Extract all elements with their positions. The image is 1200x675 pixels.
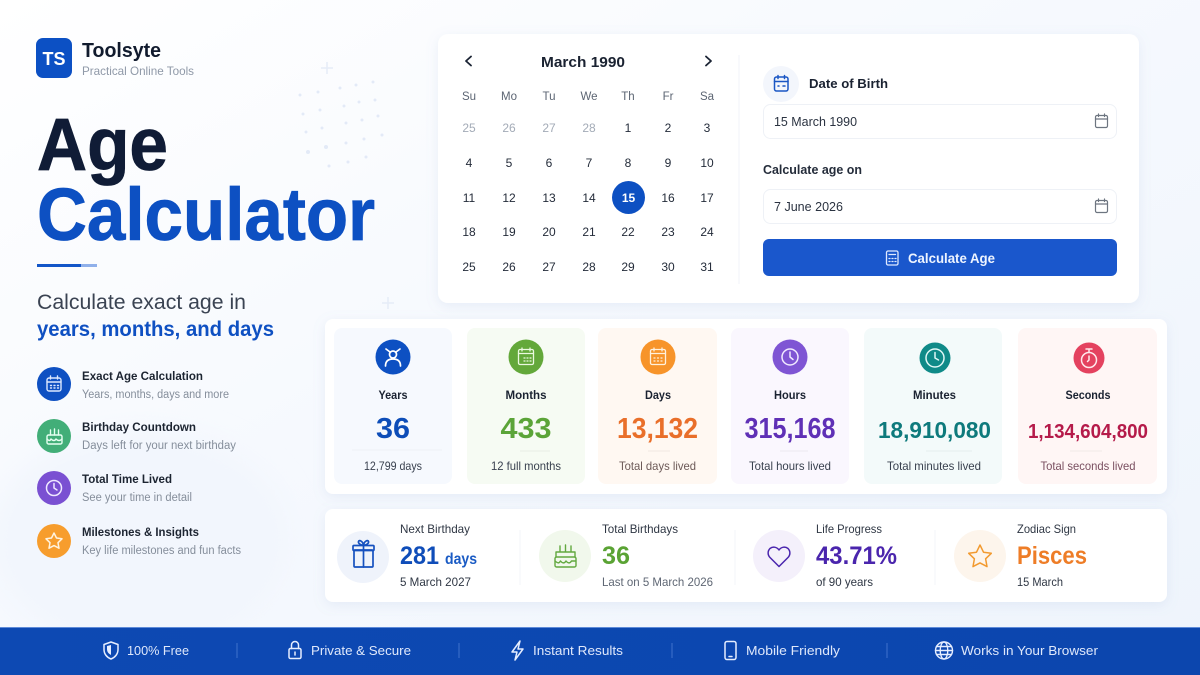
date grid: 25	[462, 121, 476, 135]
feature: milestones: Milestones & Insights	[82, 525, 199, 539]
feature: time lived	[37, 471, 192, 505]
stat: years: 12,799 days	[364, 459, 422, 473]
insight: next birthday: Next Birthday	[400, 522, 470, 536]
date grid: 31	[700, 260, 714, 274]
stat: minutes	[864, 328, 1002, 484]
date grid: 12	[502, 191, 516, 205]
stat: months: 12 full months	[491, 459, 561, 473]
badge: mobile: Mobile Friendly	[746, 643, 841, 658]
input: calculate date: 7 June 2026	[774, 199, 843, 214]
calendar	[462, 54, 715, 274]
date grid: 28	[582, 121, 596, 135]
input: date of birth: 15 March 1990	[774, 114, 857, 129]
feature: milestones: Key life milestones and fun facts	[82, 545, 241, 557]
date grid: 15	[622, 191, 635, 205]
stat: days: Days	[645, 388, 671, 402]
input: calculate date	[764, 190, 1116, 224]
stat: seconds	[1018, 328, 1157, 484]
title: Age	[37, 103, 168, 186]
stat: minutes: Minutes	[913, 388, 956, 402]
date grid: 4	[466, 156, 473, 170]
insight: zodiac sign: Pisces	[1017, 542, 1087, 570]
brand name: Toolsyte	[82, 40, 161, 62]
feature: birthday: Birthday Countdown	[82, 420, 196, 434]
feature: exact age: Exact Age Calculation	[82, 369, 203, 383]
date grid: 8	[625, 156, 632, 170]
panel: calendar and form	[438, 34, 1139, 303]
feature: exact age	[37, 367, 229, 401]
date grid: 20	[542, 225, 556, 239]
insight: zodiac sign: Zodiac Sign	[1017, 522, 1076, 536]
stat: days: Total days lived	[619, 459, 696, 473]
date grid: 19	[502, 225, 516, 239]
calendar header	[466, 54, 711, 71]
insight: life progress	[753, 522, 897, 589]
stat: days	[598, 328, 717, 484]
date grid: 23	[661, 225, 675, 239]
weekday row: Th	[621, 91, 635, 103]
badge: browser: Works in Your Browser	[961, 643, 1099, 658]
badge: free: 100% Free	[127, 643, 189, 658]
date grid: 11	[463, 191, 476, 205]
stat: seconds: 1,134,604,800	[1028, 421, 1148, 443]
insight: next birthday: 5 March 2027	[400, 575, 471, 589]
feature: milestones	[37, 524, 241, 558]
stat: years: 36	[376, 413, 410, 445]
insight: next birthday: 281	[400, 542, 439, 570]
date grid: 24	[700, 225, 714, 239]
feature: birthday	[37, 419, 236, 453]
date grid: 26	[502, 121, 516, 135]
weekday row	[462, 91, 715, 103]
date grid: 27	[542, 121, 556, 135]
date grid: 26	[502, 260, 516, 274]
stat: hours: Total hours lived	[749, 459, 831, 473]
date grid: 22	[621, 225, 635, 239]
stat: hours: Hours	[774, 388, 806, 402]
insight: life progress: Life Progress	[816, 522, 882, 536]
feature: birthday: Days left for your next birthday	[82, 440, 236, 452]
weekday row: Tu	[542, 91, 556, 103]
insight: total birthdays: 36	[602, 542, 630, 570]
date grid: 5	[506, 156, 513, 170]
badge: free	[104, 642, 189, 659]
date grid: 25	[462, 260, 476, 274]
brand tagline: Practical Online Tools	[82, 64, 194, 78]
insight: zodiac sign	[954, 522, 1087, 589]
date grid	[462, 121, 714, 274]
title	[37, 103, 375, 256]
insight: total birthdays	[539, 522, 713, 589]
date grid: 10	[700, 156, 714, 170]
stat: months	[467, 328, 585, 484]
subtitle: years, months, and days	[37, 318, 274, 341]
date grid: 28	[582, 260, 596, 274]
insight: next birthday	[337, 522, 477, 589]
date grid: 13	[542, 191, 556, 205]
input: date of birth	[764, 104, 1116, 138]
stat: months: 433	[500, 413, 552, 445]
stat: years: Years	[378, 388, 408, 402]
stat: minutes: 18,910,080	[878, 417, 991, 443]
button: calculate age: Calculate Age	[908, 251, 995, 266]
insight: zodiac sign: 15 March	[1017, 575, 1063, 589]
date grid: 18	[462, 225, 476, 239]
insight: life progress: 43.71%	[816, 542, 897, 570]
stat: hours: 315,168	[744, 413, 836, 445]
stat: seconds: Total seconds lived	[1040, 459, 1136, 473]
feature list	[37, 367, 241, 558]
logo	[36, 38, 194, 78]
badge: instant: Instant Results	[533, 643, 624, 658]
insight: next birthday: days	[445, 551, 477, 568]
stat: hours	[731, 328, 849, 484]
date grid: 16	[661, 191, 675, 205]
feature: time lived: Total Time Lived	[82, 472, 172, 486]
stat: months: Months	[506, 388, 547, 402]
date grid: 30	[661, 260, 675, 274]
badge: instant	[512, 641, 624, 660]
date grid: 6	[546, 156, 553, 170]
subtitle: Calculate exact age in	[37, 291, 246, 314]
button: calculate age	[763, 239, 1117, 276]
title underline	[37, 264, 97, 267]
insight: total birthdays: Last on 5 March 2026	[602, 575, 713, 589]
date grid: 7	[586, 156, 593, 170]
weekday row: Mo	[501, 91, 517, 103]
insight: life progress: of 90 years	[816, 575, 873, 589]
weekday row: Sa	[700, 91, 715, 103]
weekday row: Fr	[663, 91, 674, 103]
form: date of birth heading	[763, 66, 888, 102]
stat: days: 13,132	[617, 413, 698, 445]
subtitle	[37, 291, 274, 341]
date grid: 3	[704, 121, 711, 135]
badge: private: Private & Secure	[311, 643, 411, 658]
stat: seconds: Seconds	[1066, 388, 1111, 402]
stat: minutes: Total minutes lived	[887, 459, 981, 473]
insight: total birthdays: Total Birthdays	[602, 522, 678, 536]
weekday row: We	[580, 91, 598, 103]
date grid: 27	[542, 260, 556, 274]
date grid: 21	[582, 225, 596, 239]
date grid: 17	[700, 191, 714, 205]
title: Calculator	[37, 173, 375, 256]
feature: exact age: Years, months, days and more	[82, 389, 229, 401]
panel: stats	[325, 319, 1167, 494]
date grid: 2	[665, 121, 672, 135]
feature: time lived: See your time in detail	[82, 492, 192, 504]
label: calculate age on: Calculate age on	[763, 163, 862, 177]
date grid: 1	[625, 121, 632, 135]
badge: mobile	[725, 642, 841, 660]
date grid: 14	[582, 191, 596, 205]
form: date of birth heading: Date of Birth	[809, 76, 888, 91]
calendar header: March 1990	[541, 54, 625, 71]
stat: years	[334, 328, 452, 484]
date grid: 29	[621, 260, 635, 274]
footer bar	[0, 627, 1200, 675]
date grid: 9	[665, 156, 672, 170]
logo: TS	[42, 49, 66, 69]
weekday row: Su	[462, 91, 476, 103]
panel: insights	[325, 509, 1167, 602]
